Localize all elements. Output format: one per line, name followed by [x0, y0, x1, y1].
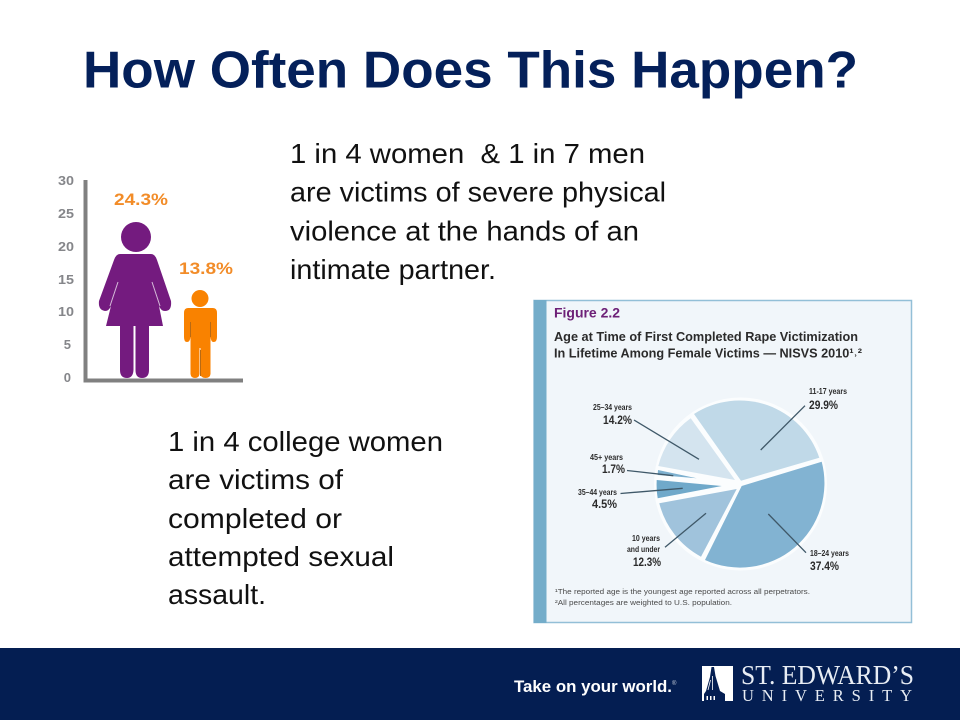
pie labels: 4.5%	[592, 499, 617, 511]
figure heading	[554, 330, 862, 360]
figure heading: In Lifetime Among Female Victims — NISVS 2010¹˒²	[554, 346, 862, 360]
slice: 45+ years	[658, 470, 697, 478]
text block: severe physical violence statistic: are victims of severe physical	[290, 176, 666, 208]
y axis labels: 20	[58, 239, 74, 254]
text block: severe physical violence statistic: intimate partner.	[290, 254, 496, 285]
panel left strip	[534, 300, 546, 623]
pie leader lines	[620, 406, 806, 553]
pie labels: 10 years	[632, 534, 660, 543]
text block: severe physical violence statistic	[290, 138, 666, 285]
text block: college women statistic: are victims of	[168, 464, 343, 495]
figure heading: Age at Time of First Completed Rape Victimization	[554, 330, 858, 344]
y axis labels: 25	[58, 206, 74, 221]
footnotes: ²All percentages are weighted to U.S. population.	[555, 600, 732, 607]
slice: 18-24 years	[705, 462, 824, 568]
panel background	[534, 300, 912, 622]
slice: 10 years and under	[659, 489, 737, 557]
y axis labels: 30	[58, 173, 74, 188]
label: men percentage: 13.8%	[179, 260, 233, 278]
pie labels: 12.3%	[633, 557, 661, 569]
pie labels: 37.4%	[810, 561, 839, 573]
y axis labels: 0	[64, 370, 71, 385]
y axis labels	[58, 173, 74, 385]
pie chart	[654, 398, 827, 570]
title: How Often Does This Happen?	[83, 40, 858, 98]
wordmark: ST. EDWARD’S	[741, 659, 914, 690]
slice: 25-34 years	[658, 418, 735, 480]
pie labels: 45+ years	[590, 453, 623, 462]
text block: college women statistic: 1 in 4 college women	[168, 426, 443, 457]
icon: university tower logo	[702, 666, 733, 701]
figure number: Figure 2.2	[554, 306, 620, 320]
text block: college women statistic: attempted sexual	[168, 541, 394, 572]
y axis labels: 5	[64, 337, 71, 352]
text block: college women statistic: assault.	[168, 579, 266, 610]
slice: 11-17 years	[694, 400, 819, 481]
pie labels: 18–24 years	[810, 549, 849, 558]
pie labels: 11-17 years	[809, 387, 847, 396]
text block: college women statistic	[168, 426, 443, 610]
pie labels: 25–34 years	[593, 403, 632, 412]
y axis labels: 15	[58, 272, 74, 287]
footnotes: ¹The reported age is the youngest age reported across all perpetrators.	[555, 589, 810, 596]
pie labels: 1.7%	[602, 464, 625, 476]
tagline: Take on your world.	[514, 678, 672, 696]
panel: figure 2.2 pie chart	[534, 300, 912, 623]
icon: woman figure	[99, 222, 171, 378]
label: women percentage: 24.3%	[114, 191, 168, 209]
icon: man figure	[184, 290, 217, 378]
axes	[86, 180, 243, 380]
footnotes	[555, 589, 810, 607]
registered mark: ®	[672, 680, 677, 687]
footer bar: UNIVERSITY	[742, 686, 912, 705]
chart: pictogram of women and men victims	[58, 173, 243, 385]
pie labels: 14.2%	[603, 415, 632, 427]
pie labels: 29.9%	[809, 400, 838, 412]
slice: 35-44 years	[657, 480, 722, 498]
pie labels: 35–44 years	[578, 488, 617, 497]
text block: severe physical violence statistic: 1 in 4 women & 1 in 7 men	[290, 138, 645, 169]
pie labels: and under	[627, 545, 660, 554]
text block: college women statistic: completed or	[168, 503, 342, 534]
y axis labels: 10	[58, 304, 74, 319]
pie labels	[578, 387, 849, 573]
text block: severe physical violence statistic: violence at the hands of an	[290, 216, 639, 246]
footer bar	[0, 648, 960, 720]
